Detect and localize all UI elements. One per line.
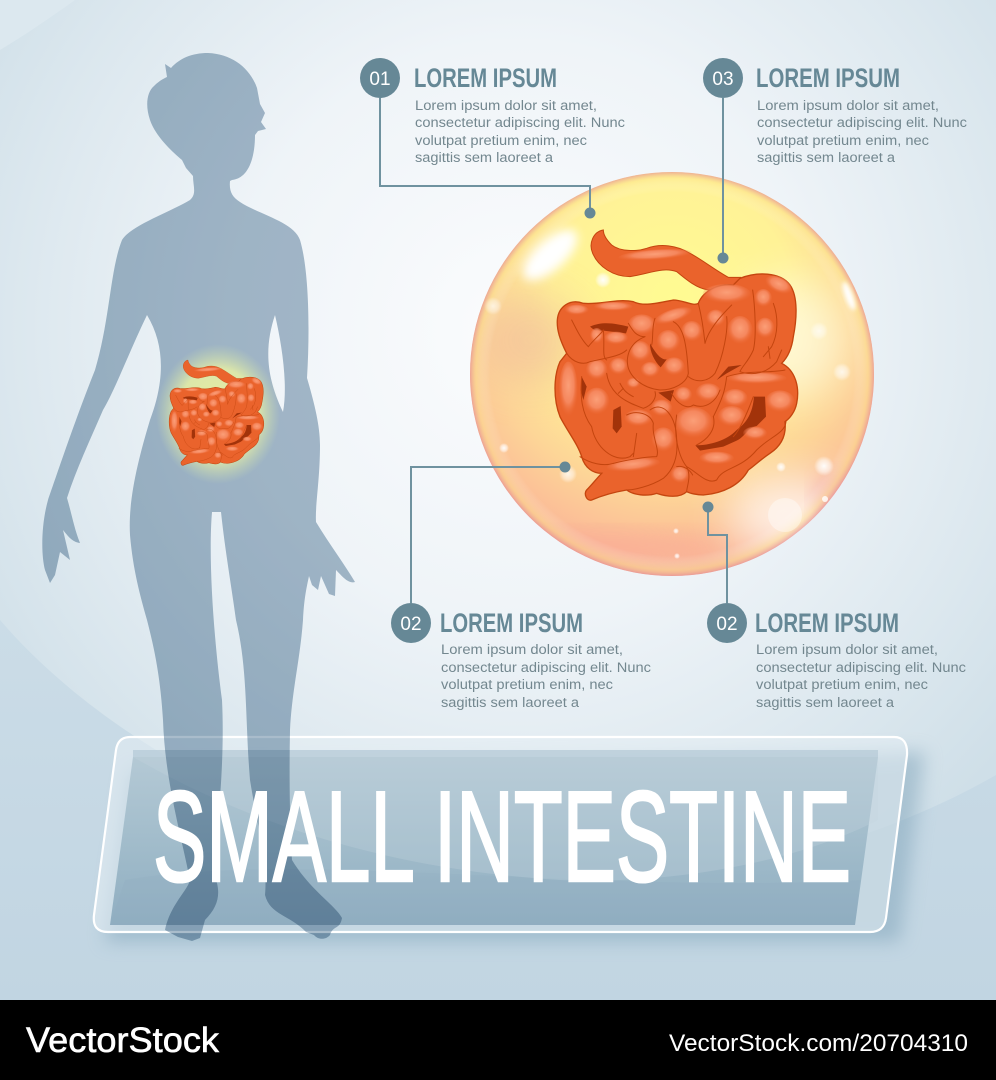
callout 02 left: consectetur adipiscing elit. Nunc: [441, 660, 651, 675]
callout 02 right: sagittis sem laoreet a: [756, 695, 895, 710]
small intestine on body: [169, 360, 264, 465]
callout 02 right: volutpat pretium enim, nec: [756, 677, 928, 692]
callout 01: sagittis sem laoreet a: [415, 150, 554, 165]
bubble highlights: [484, 221, 858, 559]
callout 02 left: volutpat pretium enim, nec: [441, 677, 613, 692]
callout 03: [703, 58, 967, 264]
glow around small intestine: [156, 344, 280, 484]
callout 02 left: Lorem ipsum dolor sit amet,: [441, 642, 623, 657]
callout 01: Lorem ipsum dolor sit amet,: [415, 98, 597, 113]
callout 03: volutpat pretium enim, nec: [757, 133, 929, 148]
footer bar: VectorStock: [26, 1021, 220, 1060]
callout 02 left: sagittis sem laoreet a: [441, 695, 580, 710]
callout 02 right: [702, 502, 966, 710]
callout 03: 03: [712, 69, 734, 90]
callout 01: consectetur adipiscing elit. Nunc: [415, 115, 625, 130]
callout 02 left: LOREM IPSUM: [440, 608, 583, 638]
large intestine illustration: [555, 230, 798, 500]
callout 02 right: consectetur adipiscing elit. Nunc: [756, 660, 966, 675]
callout 01: [360, 58, 625, 218]
callout 02 left: [391, 462, 651, 710]
callout 01: LOREM IPSUM: [414, 63, 557, 93]
callout 02 right: 02: [716, 614, 738, 635]
callout 03: Lorem ipsum dolor sit amet,: [757, 98, 939, 113]
callout 03: sagittis sem laoreet a: [757, 150, 896, 165]
bubble sphere: [470, 172, 874, 576]
footer bar: [0, 1000, 996, 1080]
callout 01: 01: [369, 69, 391, 90]
callout 03: consectetur adipiscing elit. Nunc: [757, 115, 967, 130]
callout 02 left: 02: [400, 614, 422, 635]
footer bar: VectorStock.com/20704310: [669, 1030, 968, 1057]
callout 03: LOREM IPSUM: [756, 63, 900, 93]
callout 01: volutpat pretium enim, nec: [415, 133, 587, 148]
silhouette of woman: [42, 53, 355, 941]
callout 02 right: LOREM IPSUM: [755, 608, 899, 638]
glass title panel: [94, 737, 925, 942]
callout 02 right: Lorem ipsum dolor sit amet,: [756, 642, 938, 657]
